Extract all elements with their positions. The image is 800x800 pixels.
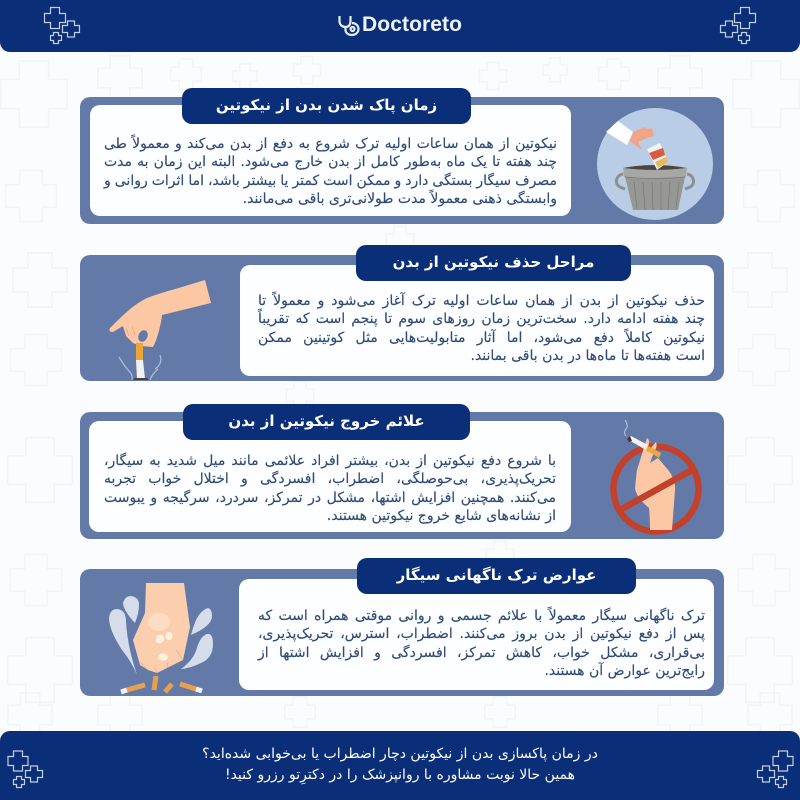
call-to-action text: در زمان پاکسازی بدن از نیکوتین دچار اضطراب یا بی‌خوابی شده‌اید؟ [202,746,598,762]
text block [103,134,557,207]
text block: پس از دفع نیکوتین از بدن بروز می‌کنند. اضطراب، استرس، تحریک‌پذیری، [258,626,705,642]
text block: است هفته‌ها تا ماه‌ها در بدن باقی بمانند. [470,348,705,364]
text block: با شروع دفع نیکوتین از بدن، بیشتر افراد علائمی مانند میل شدید به سیگار، [104,453,556,469]
heading [357,558,636,594]
heading [356,245,631,281]
heading: زمان پاک شدن بدن از نیکوتین [216,96,437,114]
icon: fist crushing cigarettes with smoke [109,583,213,694]
panel: nicotine removal stages [80,245,724,381]
text block: بی‌قراری، مشکل خواب، کاهش تمرکز، افسردگی و افزایش اشتها از [258,645,705,661]
text block: چند هفته تا یک ماه به‌طور کامل از بدن خارج می‌شود. البته این زمان به مدت [104,154,557,170]
icon: header crosses left [44,6,80,44]
heading: مراحل حذف نیکوتین از بدن [393,253,594,271]
heading [182,88,471,124]
header bar [0,0,800,52]
logo: Doctoreto [338,13,462,36]
call-to-action text [202,746,598,784]
call-to-action text: همین حالا نوبت مشاوره با روانپزشک را در دکترِتو رزرو کنید! [225,767,575,783]
icon: hand dropping cigarettes in trash can [597,108,713,220]
heading: علائم خروج نیکوتین از بدن [228,412,425,430]
text block: نیکوتین کاملاً دفع می‌شود، اما آثار متابولیت‌هایی مثل کوتینین ممکن [258,330,705,346]
icon: hand stubbing out cigarette [109,280,211,380]
text block: رایج‌ترین عوارض آن هستند. [544,663,705,679]
icon: footer crosses left [7,750,44,788]
text block: چند هفته ادامه دارد. سخت‌ترین زمان روزهای سوم تا پنجم است که تقریباً [258,311,705,327]
text block: ترک ناگهانی سیگار معمولاً با علائم جسمی و روانی موقتی همراه است که [258,608,705,624]
icon: no smoking sign with hand [610,420,702,535]
brand name: Doctoreto [362,13,462,36]
panel: side effects of sudden quitting [80,558,724,696]
text block: نیکوتین از همان ساعات اولیه ترک شروع به دفع از بدن می‌کند و معمولاً طی [104,136,557,152]
text block: تحریک‌پذیری، بی‌حوصلگی، اضطراب، افسردگی و اختلال خواب تجربه [104,471,556,487]
text block [258,291,705,364]
text block [257,606,705,679]
text block: مصرف سیگار بستگی دارد و ممکن است کمتر یا بیشتر باشد، اما اثرات روانی و [104,173,557,189]
heading [183,404,470,440]
icon: footer crosses right [756,750,794,788]
icon: stethoscope [338,16,360,36]
text block: وابستگی ذهنی معمولاً مدت طولانی‌تری باقی می‌مانند. [243,191,557,207]
icon: header crosses right [720,6,756,44]
text block: از نشانه‌های شایع خروج نیکوتین هستند. [327,508,556,524]
text block: می‌کنند. همچنین افزایش اشتها، مشکل در تمرکز، سردرد، سرگیجه و یبوست [104,490,556,506]
heading: عوارض ترک ناگهانی سیگار [397,566,596,584]
text block: حذف نیکوتین از بدن از همان ساعات اولیه ترک آغاز می‌شود و معمولاً تا [258,293,705,309]
panel: body clearance time [80,88,724,224]
panel: nicotine withdrawal symptoms [80,404,724,539]
footer call to action [0,731,800,800]
text block [104,452,556,524]
